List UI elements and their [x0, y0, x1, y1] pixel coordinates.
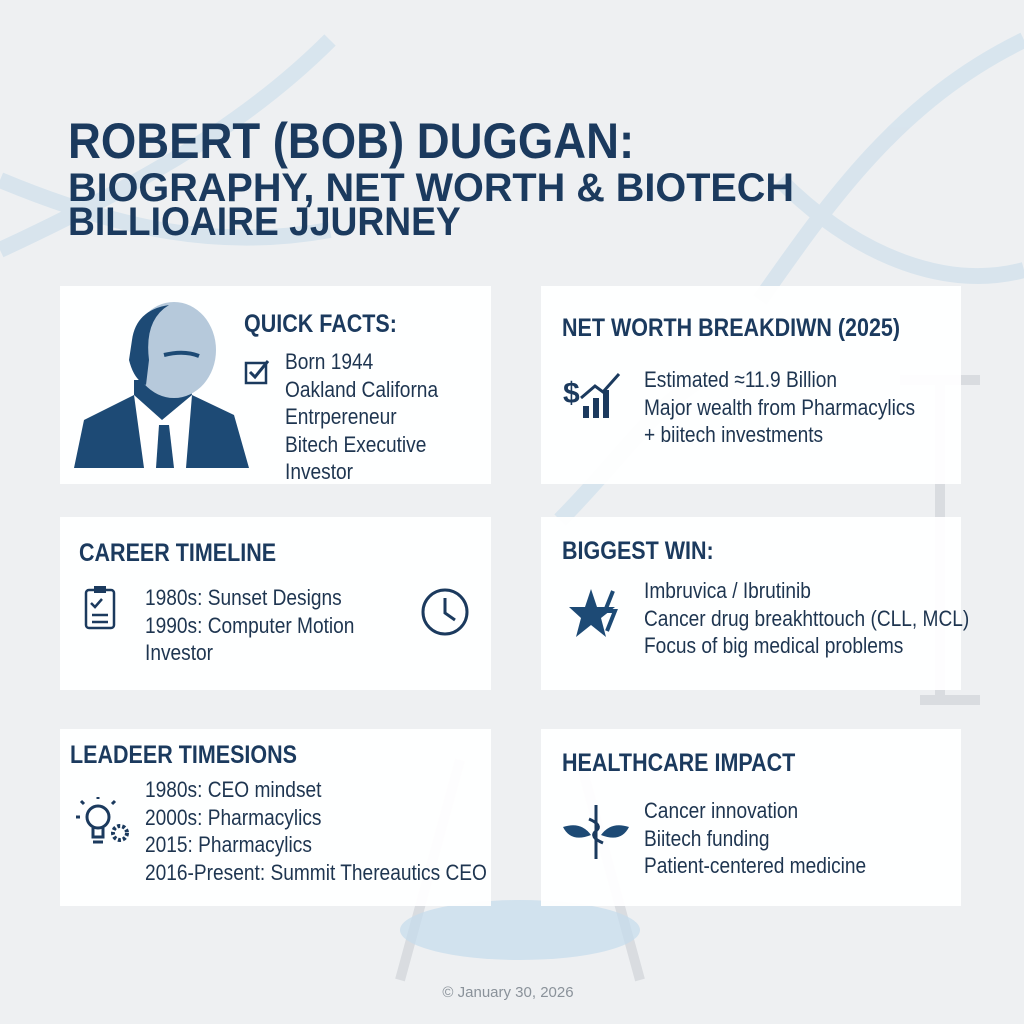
icon: chart dollar [563, 373, 620, 418]
panel: biggest win: Imbruvica / Ibrutinib [644, 578, 811, 603]
panel: leadership: LEADEER TIMESIONS [70, 741, 297, 769]
panel: quick facts [60, 286, 491, 484]
icon: caduceus [563, 805, 629, 859]
panel: quick facts: Born 1944 [285, 349, 373, 374]
panel: healthcare impact [541, 729, 961, 906]
panel: leadership: 2016-Present: Summit Thereautics CEO [145, 860, 487, 884]
title: BILLIOAIRE JJURNEY [68, 200, 461, 244]
title [68, 113, 794, 244]
panel: biggest win: Focus of big medical problems [644, 633, 903, 658]
panel: net worth: + biitech investments [644, 422, 823, 447]
panel: leadership: 2000s: Pharmacylics [145, 804, 321, 830]
icon: checkbox [244, 360, 270, 384]
panel: leadership: 2015: Pharmacylics [145, 832, 312, 857]
icon: chart dollar: $ [563, 377, 580, 410]
panel: net worth [541, 286, 961, 484]
panel: biggest win: BIGGEST WIN: [562, 537, 714, 565]
title: BIOGRAPHY, NET WORTH & BIOTECH [68, 166, 794, 210]
panel: career timeline: 1990s: Computer Motion [145, 612, 354, 638]
panel: healthcare impact: HEALTHCARE IMPACT [562, 749, 795, 777]
panel: net worth: NET WORTH BREAKDIWN (2025) [562, 314, 900, 342]
panel: biggest win: Cancer drug breakhttouch (CLL, MCL) [644, 606, 969, 630]
icon: star bolt [569, 589, 618, 637]
footer: © January 30, 2026 [442, 984, 574, 1001]
panel: quick facts: Investor [285, 459, 353, 484]
panel: quick facts: QUICK FACTS: [244, 310, 397, 338]
panel: quick facts: Entrpereneur [285, 404, 397, 429]
icon: clipboard [84, 586, 116, 630]
panel: career timeline: CAREER TIMELINE [79, 539, 276, 567]
panel: career timeline: Investor [145, 640, 213, 665]
panel: quick facts: Bitech Executive [285, 432, 426, 456]
panel: healthcare impact: Patient-centered medicine [644, 853, 866, 878]
panel: career timeline [60, 517, 491, 690]
panel: net worth: Estimated ≈11.9 Billion [644, 367, 837, 392]
title: ROBERT (BOB) DUGGAN: [68, 113, 634, 169]
panel: biggest win [541, 517, 961, 690]
icon: clock [422, 588, 468, 636]
panel: leadership: 1980s: CEO mindset [145, 777, 321, 802]
icon: portrait [74, 302, 249, 468]
panel: quick facts: Oakland Californa [285, 376, 438, 402]
panel: career timeline: 1980s: Sunset Designs [145, 585, 342, 610]
panel: healthcare impact: Cancer innovation [644, 798, 798, 823]
panel: net worth: Major wealth from Pharmacylics [644, 394, 915, 420]
icon: lightbulb gear [76, 797, 129, 844]
panel: leadership [60, 729, 491, 906]
panel: healthcare impact: Biitech funding [644, 826, 769, 850]
